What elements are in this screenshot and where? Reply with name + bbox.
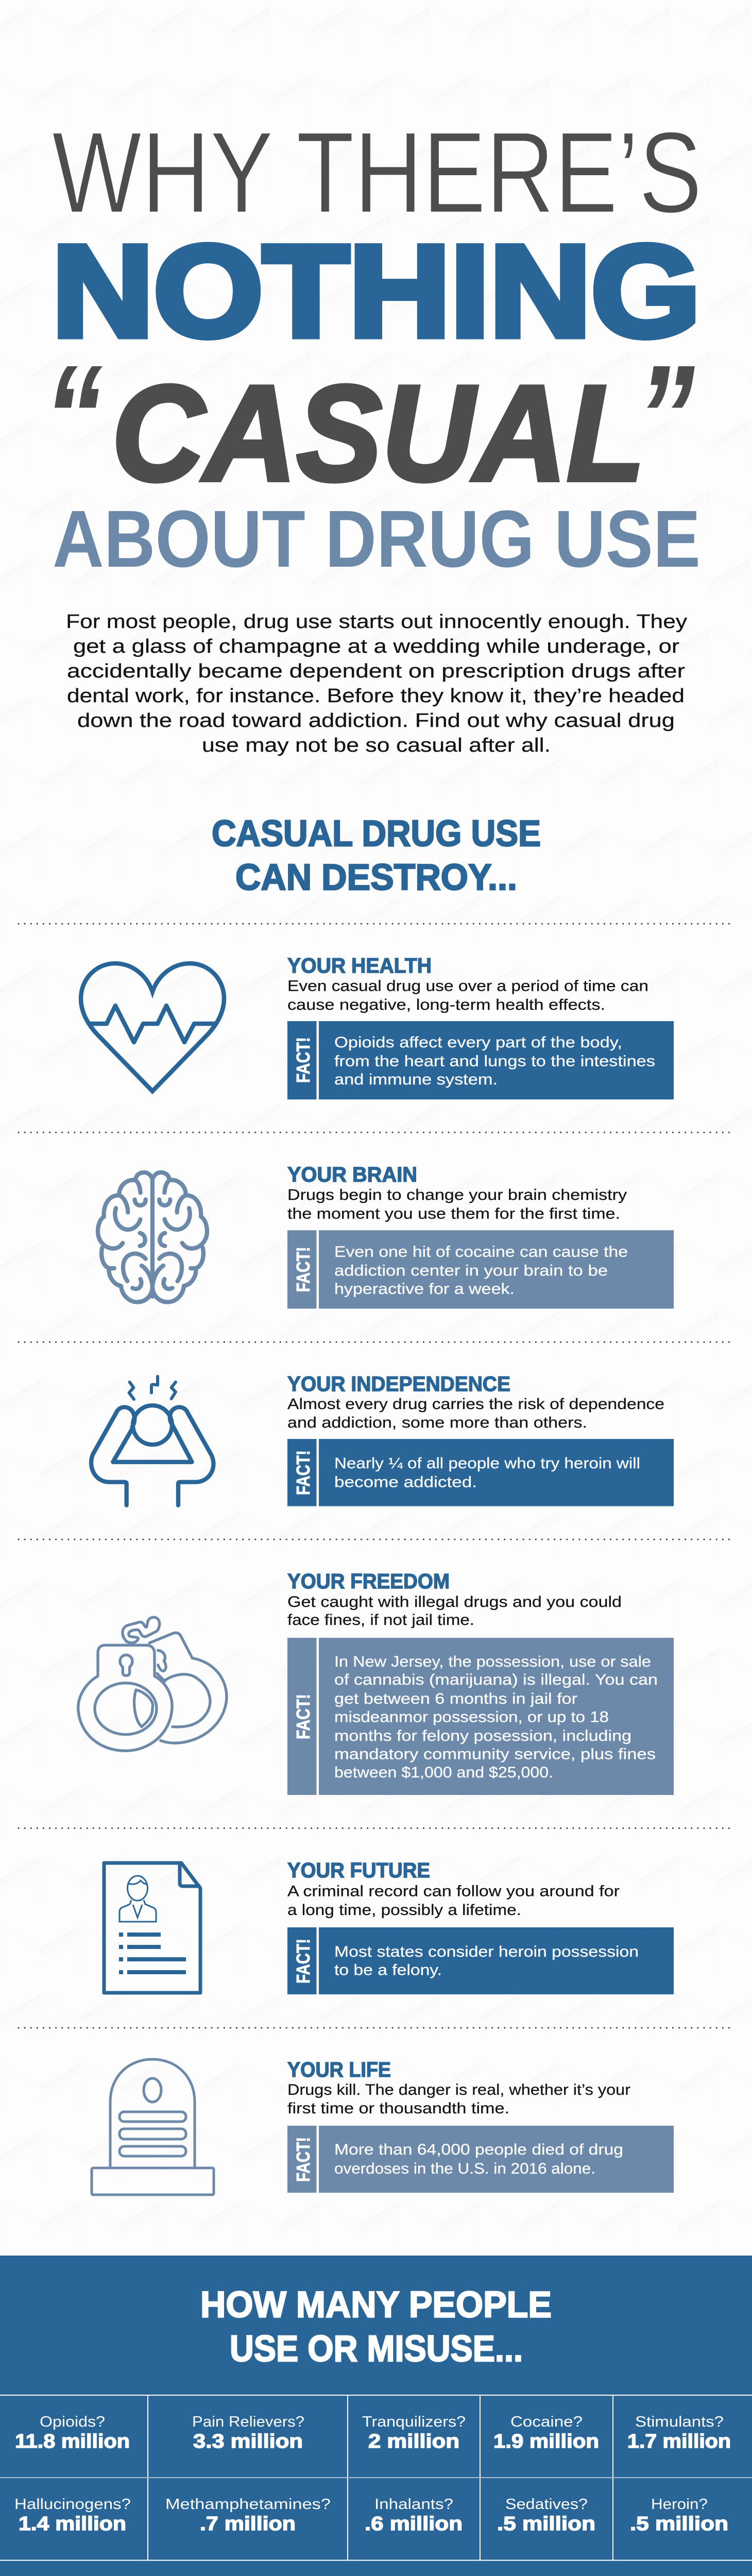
text block xyxy=(287,1883,620,1919)
text block: Even casual drug use over a period of time can xyxy=(287,978,648,994)
stat: opioids xyxy=(15,2414,130,2452)
fact box: FACT! xyxy=(293,1939,314,1984)
text block: Almost every drug carries the risk of dependence xyxy=(287,1396,664,1413)
intro paragraph: use may not be so casual after all. xyxy=(202,735,551,756)
heading: YOUR INDEPENDENCE xyxy=(287,1372,510,1396)
text block xyxy=(287,1396,664,1431)
stat: tranquilizers: Tranquilizers? xyxy=(362,2414,466,2430)
section heading: casual drug use can destroy xyxy=(212,814,541,898)
fact box xyxy=(287,2126,674,2193)
stat: hallucinogens: 1.4 million xyxy=(19,2513,126,2535)
fact box: Even one hit of cocaine can cause the xyxy=(334,1244,628,1260)
title line: nothing: NOTHING xyxy=(52,219,700,364)
stat: hallucinogens xyxy=(14,2496,131,2535)
fact box: FACT! xyxy=(293,1247,314,1292)
stat: pain relievers: Pain Relievers? xyxy=(192,2414,304,2430)
text block: the moment you use them for the first time. xyxy=(287,1206,620,1222)
fact box: In New Jersey, the possession, use or sale xyxy=(334,1653,651,1670)
heading: YOUR LIFE xyxy=(287,2058,391,2081)
panel: your health xyxy=(81,954,674,1099)
text block xyxy=(287,1594,622,1629)
heading: YOUR HEALTH xyxy=(287,954,432,977)
stat: methamphetamines xyxy=(165,2496,331,2535)
stat: sedatives: Sedatives? xyxy=(505,2496,588,2513)
text block: Drugs kill. The danger is real, whether it’s your xyxy=(287,2081,630,2098)
fact box: misdeanmor possession, or up to 18 xyxy=(334,1708,609,1726)
fact box xyxy=(287,1927,674,1994)
stat: sedatives: .5 million xyxy=(497,2513,595,2535)
stat: inhalants: .6 million xyxy=(365,2513,463,2535)
intro paragraph: dental work, for instance. Before they know it, they’re headed xyxy=(67,685,685,707)
text block: A criminal record can follow you around for xyxy=(287,1883,620,1900)
heading: YOUR FUTURE xyxy=(287,1858,430,1882)
panel: your brain xyxy=(98,1162,674,1309)
section heading: casual drug use can destroy: CASUAL DRUG USE xyxy=(212,814,541,854)
panel: how many people use or misuse xyxy=(0,2256,752,2576)
fact box xyxy=(287,1439,674,1506)
fact box: between $1,000 and $25,000. xyxy=(334,1764,553,1781)
fact box: More than 64,000 people died of drug xyxy=(334,2141,623,2158)
stat: pain relievers xyxy=(192,2414,304,2452)
title line: casual with quotes: CASUAL xyxy=(112,357,645,509)
fact box: Opioids affect every part of the body, xyxy=(334,1034,622,1051)
section heading: casual drug use can destroy: CAN DESTROY... xyxy=(235,857,517,898)
title line: casual with quotes: ” xyxy=(636,335,695,499)
fact box: and immune system. xyxy=(334,1071,498,1088)
fact box: FACT! xyxy=(293,1694,314,1739)
stat: tranquilizers xyxy=(362,2414,466,2452)
icon: brain xyxy=(98,1173,207,1302)
intro paragraph: down the road toward addiction. Find out why casual drug xyxy=(77,710,675,732)
text block: a long time, possibly a lifetime. xyxy=(287,1902,521,1919)
panel: your independence xyxy=(91,1372,674,1506)
stat: stimulants: Stimulants? xyxy=(635,2414,724,2430)
stat: heroin: .5 million xyxy=(630,2513,728,2535)
text block xyxy=(287,2081,630,2117)
fact box: FACT! xyxy=(293,2137,314,2182)
text block: Get caught with illegal drugs and you could xyxy=(287,1594,622,1611)
text block: first time or thousandth time. xyxy=(287,2100,509,2117)
title xyxy=(44,108,702,584)
stat: pain relievers: 3.3 million xyxy=(193,2431,303,2452)
stat: opioids: 11.8 million xyxy=(15,2431,130,2452)
text block xyxy=(287,978,648,1013)
fact box xyxy=(287,1638,674,1795)
fact box: Most states consider heroin possession xyxy=(334,1943,639,1960)
icon: heart with pulse xyxy=(81,963,224,1091)
stat: inhalants: Inhalants? xyxy=(374,2496,453,2513)
stat: heroin: Heroin? xyxy=(651,2496,708,2513)
fact box: Nearly ¼ of all people who try heroin will xyxy=(334,1455,640,1472)
icon: criminal record document xyxy=(104,1863,200,1993)
icon: tombstone xyxy=(92,2059,214,2195)
fact box: hyperactive for a week. xyxy=(334,1281,515,1297)
fact box xyxy=(287,1021,674,1099)
fact box: get between 6 months in jail for xyxy=(334,1690,577,1707)
stat: opioids: Opioids? xyxy=(40,2414,105,2430)
fact box: of cannabis (marijuana) is illegal. You can xyxy=(334,1671,658,1688)
fact box: to be a felony. xyxy=(334,1962,442,1979)
stat: cocaine: 1.9 million xyxy=(493,2431,599,2452)
fact box: addiction center in your brain to be xyxy=(334,1262,608,1279)
stat: stimulants xyxy=(627,2414,731,2452)
stat: hallucinogens: Hallucinogens? xyxy=(14,2496,131,2513)
fact box: from the heart and lungs to the intestines xyxy=(334,1053,655,1070)
panel: your freedom xyxy=(78,1569,674,1795)
heading: YOUR FREEDOM xyxy=(287,1569,450,1593)
text block: face fines, if not jail time. xyxy=(287,1612,474,1629)
fact box: mandatory community service, plus fines xyxy=(334,1745,656,1763)
fact box: FACT! xyxy=(293,1037,314,1083)
title line: casual with quotes: “ xyxy=(44,335,102,499)
stat: methamphetamines: Methamphetamines? xyxy=(165,2496,331,2513)
text block: Drugs begin to change your brain chemistry xyxy=(287,1187,627,1204)
heading: YOUR BRAIN xyxy=(287,1162,417,1186)
stat: cocaine xyxy=(493,2414,599,2452)
fact box: become addicted. xyxy=(334,1473,477,1491)
stat: heroin xyxy=(630,2496,728,2535)
icon: stressed person holding head xyxy=(91,1377,213,1505)
heading: HOW MANY PEOPLE xyxy=(200,2284,552,2326)
fact box: overdoses in the U.S. in 2016 alone. xyxy=(334,2160,595,2177)
text block: and addiction, some more than others. xyxy=(287,1414,587,1431)
heading: USE OR MISUSE... xyxy=(230,2329,523,2369)
fact box: months for felony posession, including xyxy=(334,1727,631,1744)
stat: sedatives xyxy=(497,2496,595,2535)
intro paragraph: accidentally became dependent on prescription drugs after xyxy=(67,660,685,682)
icon: handcuffs xyxy=(78,1617,227,1751)
stat: inhalants xyxy=(365,2496,463,2535)
stat table xyxy=(14,2414,731,2535)
heading xyxy=(200,2284,552,2369)
stat: tranquilizers: 2 million xyxy=(368,2431,459,2452)
stat: stimulants: 1.7 million xyxy=(627,2431,731,2452)
intro paragraph: get a glass of champagne at a wedding while underage, or xyxy=(73,636,679,657)
panel: your future xyxy=(104,1858,674,1994)
text block: cause negative, long-term health effects. xyxy=(287,996,605,1013)
intro paragraph xyxy=(66,611,687,756)
stat: cocaine: Cocaine? xyxy=(510,2414,583,2430)
text block xyxy=(287,1187,627,1222)
panel: your life xyxy=(92,2058,674,2195)
fact box: FACT! xyxy=(293,1450,314,1495)
stat: methamphetamines: .7 million xyxy=(200,2513,296,2535)
fact box xyxy=(287,1230,674,1309)
intro paragraph: For most people, drug use starts out innocently enough. They xyxy=(66,611,687,633)
